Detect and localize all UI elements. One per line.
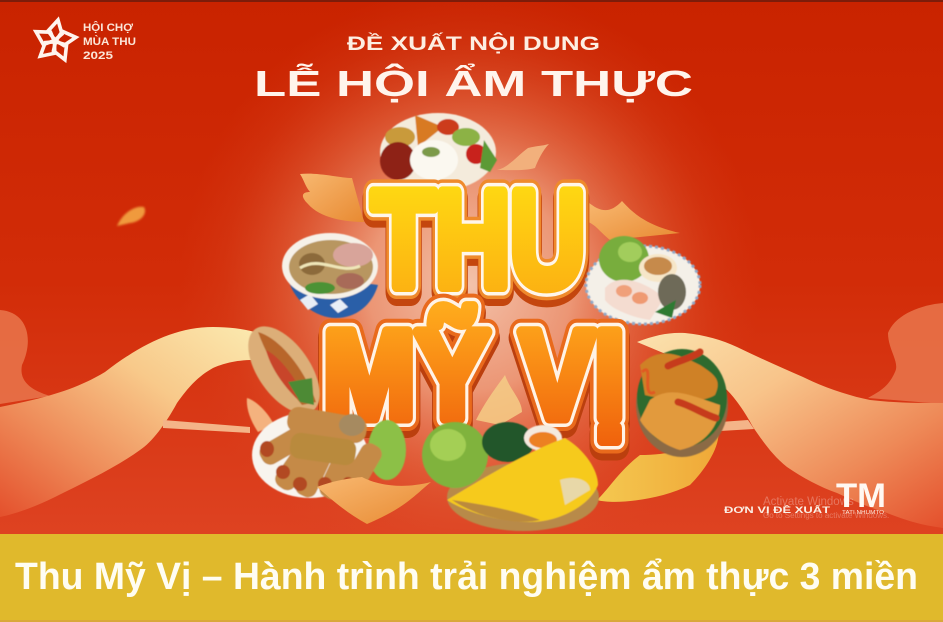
heading: subtitle: ĐỀ XUẤT NỘI DUNG: [347, 33, 600, 55]
icon: autumn leaf left: [300, 174, 364, 222]
icon: star flower: [33, 20, 77, 62]
food: pho bowl: [282, 233, 378, 318]
icon: autumn leaf top right: [497, 144, 549, 170]
big title: THU: THU: [372, 163, 585, 315]
logo text: MÙA THU: [83, 35, 136, 48]
icon: falling petal: [117, 207, 145, 226]
big title: THU: THU: [372, 169, 585, 321]
watermark text: Activate Windows: [763, 496, 854, 508]
icon: yellow leaf right: [597, 428, 719, 502]
caption banner: [0, 534, 943, 622]
decorative ribbon: left: [0, 310, 258, 517]
watermark text: [763, 496, 889, 520]
logo: TM: TATI NHUMTO: [842, 510, 884, 516]
big title: MỸ VỊ: MỸ VỊ: [323, 306, 625, 445]
big title: MỸ VỊ: MỸ VỊ: [323, 306, 625, 445]
food: prawn cake plate: [636, 349, 728, 457]
watermark text: Go to Settings to activate Windows.: [763, 511, 889, 520]
logo text: 2025: [83, 50, 113, 62]
big title: MỸ VỊ: MỸ VỊ: [323, 306, 625, 445]
food: banh xeo: [422, 422, 599, 531]
food: banh mi: [234, 314, 334, 426]
logo text: [83, 21, 136, 62]
big title: MỸ VỊ: MỸ VỊ: [323, 312, 625, 451]
logo: TM: TM: [836, 477, 886, 515]
icon: yellow leaf behind VỊ: [476, 375, 522, 425]
label: proposing unit: ĐƠN VỊ ĐỀ XUẤT: [724, 505, 830, 516]
big title: THU: THU: [372, 163, 585, 315]
heading: title: LỄ HỘI ẨM THỰC: [254, 62, 693, 104]
logo: Hội chợ Mùa Thu: [33, 20, 136, 62]
big title: THU: THU: [372, 163, 585, 315]
icon: autumn leaf right: [588, 201, 680, 240]
decorative ribbon: right: [637, 303, 943, 528]
icon: orange leaf bottom: [317, 477, 431, 524]
food: spring rolls plate: [586, 236, 700, 324]
food: fried spring roll plate: [247, 398, 406, 502]
food: rice plate: [380, 113, 497, 191]
logo text: HỘI CHỢ: [83, 21, 134, 34]
caption text: Thu Mỹ Vị – Hành trình trải nghiệm ẩm thực 3 miền: [15, 556, 918, 598]
